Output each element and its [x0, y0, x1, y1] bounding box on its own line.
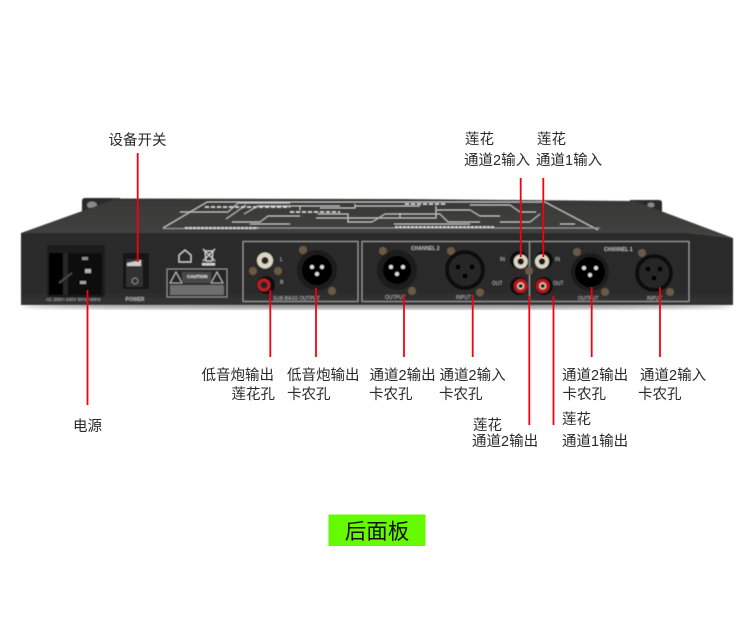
caution label	[167, 269, 227, 297]
label: device switch: 设备开关	[108, 132, 166, 149]
label: lotus channel 2 input: 通道2输入	[464, 152, 530, 169]
label: channel 2 xlr output: 通道2输出	[370, 367, 436, 384]
power switch	[123, 253, 149, 303]
sub bass output section: R	[280, 280, 284, 286]
channel 1 section	[530, 242, 689, 302]
xlr male	[297, 250, 337, 290]
label: subwoofer lotus output: 莲花孔	[232, 386, 275, 403]
sub bass output section: L	[280, 257, 283, 263]
left mounting bracket	[82, 198, 120, 212]
label: channel 2 xlr input right: 卡农孔	[638, 386, 682, 403]
label: channel 2 xlr output right: 通道2输出	[562, 367, 628, 384]
label: lotus channel 1 output: 莲花	[562, 411, 591, 428]
channel 2 section: INPUT	[456, 295, 471, 301]
channel 2 section	[362, 242, 530, 302]
caption badge	[328, 514, 426, 546]
power socket: AC 200V~240V 50Hz~60Hz	[46, 297, 101, 302]
label: power: 电源	[73, 418, 102, 435]
power switch: POWER	[126, 297, 145, 303]
label: channel 2 xlr input right: 通道2输入	[640, 367, 706, 384]
circuit diagram on top	[163, 202, 600, 230]
channel 2 section: IN	[500, 257, 505, 263]
xlr male output	[377, 250, 417, 290]
channel 1 section: CHANNEL 1	[604, 247, 633, 253]
label: subwoofer xlr output: 低音炮输出	[287, 367, 360, 384]
xlr female input	[635, 254, 673, 292]
device top cover	[21, 198, 733, 238]
caution label: CAUTION	[187, 274, 208, 279]
sub bass output section	[243, 242, 358, 302]
red pointer lines	[88, 153, 660, 425]
label: lotus channel 2 output: 通道2输出	[472, 433, 538, 450]
label: lotus channel 1 input: 莲花	[537, 131, 566, 148]
channel 1 section: OUT	[553, 281, 564, 287]
label: channel 2 xlr output right: 卡农孔	[562, 386, 606, 403]
label: subwoofer lotus output: 低音炮输出	[202, 367, 274, 384]
label: lotus channel 2 output: 莲花	[473, 417, 502, 434]
channel 2 section: OUTPUT	[385, 295, 406, 301]
label: channel 2 xlr output: 卡农孔	[369, 386, 413, 403]
rca red R	[257, 276, 275, 294]
label: lotus channel 2 input: 莲花	[465, 131, 494, 148]
xlr male output	[571, 253, 609, 291]
channel 1 section: INPUT	[647, 296, 662, 302]
channel 1 section: IN	[555, 257, 560, 263]
channel 1 section: OUTPUT	[578, 296, 599, 302]
label: subwoofer xlr output: 卡农孔	[287, 386, 331, 403]
recycling icons	[179, 249, 215, 266]
channel 2 section: CHANNEL 2	[411, 246, 440, 252]
device: rear panel	[21, 198, 733, 309]
label: channel 2 xlr input: 卡农孔	[439, 386, 483, 403]
power socket	[46, 245, 105, 302]
sub bass output section: SUB BASS OUTPUT	[273, 296, 320, 302]
caption badge: 后面板	[345, 520, 409, 544]
label: lotus channel 1 input: 通道1输入	[536, 152, 602, 169]
label: lotus channel 1 output: 通道1输出	[562, 433, 628, 450]
right mounting bracket	[630, 200, 662, 214]
device rear face	[21, 233, 733, 305]
channel 2 section: OUT	[492, 281, 503, 287]
label: channel 2 xlr input: 通道2输入	[440, 367, 506, 384]
xlr female input	[445, 250, 485, 290]
centre rca jacks	[510, 251, 553, 295]
rca white L	[257, 252, 273, 268]
